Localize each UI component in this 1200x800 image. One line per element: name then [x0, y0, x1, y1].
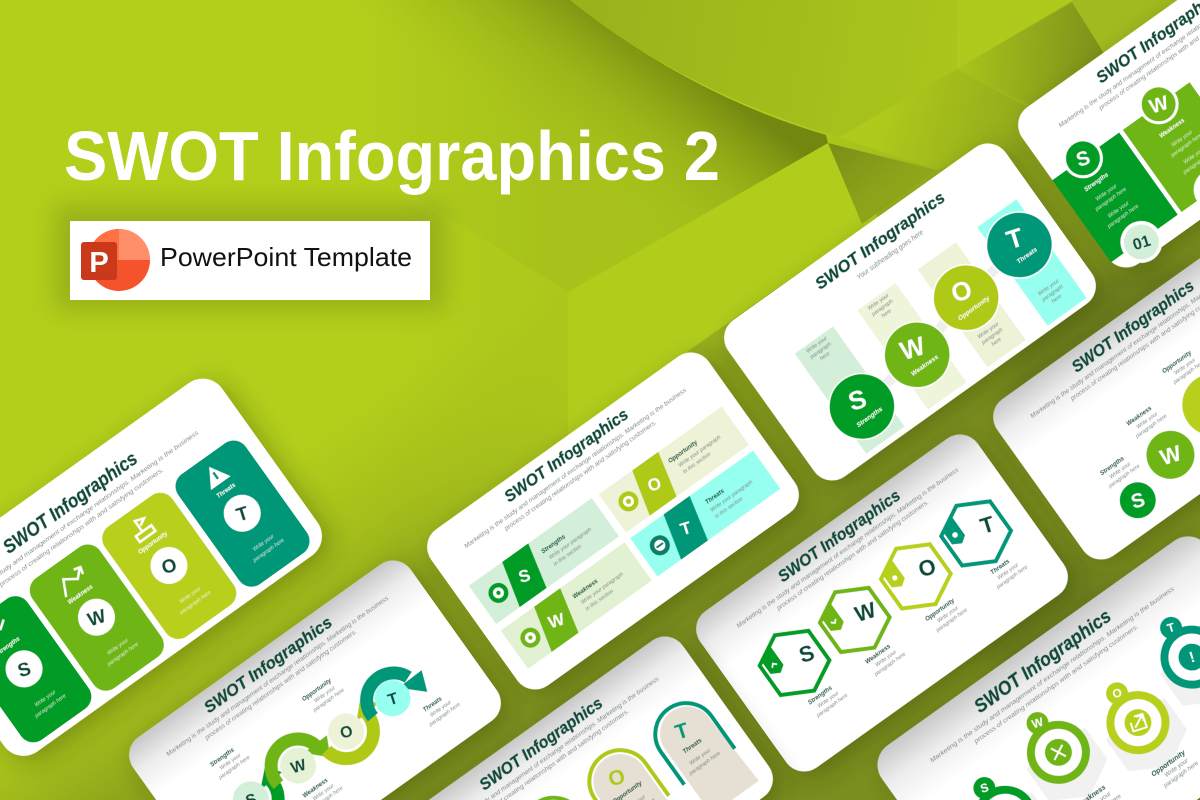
- ring W: [1002, 693, 1119, 800]
- circle W: Weakness: [910, 354, 940, 378]
- card subtitle: Marketing is the study and management of exchange relationships. Marketing is the business: [464, 388, 688, 550]
- label Opportunity: Write your: [1173, 357, 1197, 377]
- label Opportunity: Write your: [1164, 758, 1191, 779]
- label Threats: paragraph here: [427, 702, 462, 729]
- column: Threats: T: [234, 503, 252, 526]
- card subtitle: Marketing is the study and management of exchange relationships. Marketing is the business: [929, 585, 1176, 764]
- arch T: paragraph here: [687, 751, 722, 778]
- card: four circles: [715, 135, 1105, 489]
- column: Strengths: S: [15, 658, 34, 682]
- ring T: T: [1165, 620, 1177, 636]
- column S: paragraph: [808, 341, 833, 361]
- panel: Strengths: Strengths: [1084, 172, 1110, 193]
- label Weakness: Write your: [875, 649, 898, 668]
- circle W: W: [896, 330, 929, 366]
- card: panels with numbers: [1009, 0, 1200, 280]
- box: Strengths: S: [516, 565, 533, 587]
- letter circle O: O: [338, 723, 355, 743]
- label Opportunity: Opportunity: [1150, 749, 1188, 778]
- panel: Weakness: Weakness: [1159, 118, 1187, 140]
- hexagon O: O: [915, 553, 939, 582]
- label Threats: paragraph here: [995, 564, 1029, 591]
- hexagon T: T: [977, 511, 998, 539]
- column: Weakness: Weakness: [67, 584, 95, 606]
- label Opportunity: paragraph here: [1162, 760, 1200, 790]
- circle S: S: [845, 383, 870, 417]
- column: Weakness: W: [85, 606, 109, 631]
- label Opportunity: Opportunity: [301, 678, 333, 703]
- label Strengths: Strengths: [210, 747, 236, 769]
- label Strengths: Write your: [817, 690, 840, 710]
- circle W: [871, 309, 963, 401]
- label Weakness: Weakness: [302, 777, 330, 800]
- box: Strengths: Strengths: [541, 534, 567, 555]
- circle O: Opportunity: [957, 295, 991, 322]
- circle W: [1137, 421, 1200, 488]
- column S: [795, 326, 904, 454]
- box: Threats: in this section: [714, 496, 744, 520]
- arch O: O: [606, 765, 628, 792]
- hexagon S: [750, 618, 839, 708]
- column: Opportunity: O: [159, 555, 180, 579]
- panel: Strengths: Write your: [1107, 201, 1131, 220]
- box: Threats: Write your paragraph: [709, 479, 754, 514]
- box: Opportunity: [599, 407, 749, 533]
- label Strengths: paragraph here: [217, 755, 251, 782]
- card subtitle: process of creating relationships with and satisfying customers.: [972, 623, 1140, 746]
- label Threats: Threats: [990, 559, 1012, 576]
- column: Threats: Write your: [252, 534, 276, 553]
- panel: Strengths: paragraph here: [1094, 186, 1128, 213]
- card subtitle: Marketing is the study and management of exchange relationships. Marketing is the business: [166, 596, 390, 758]
- circle O: [1170, 361, 1200, 448]
- letter circle T: [367, 673, 418, 723]
- box: Weakness: in this section: [585, 589, 615, 612]
- arrow: W: [260, 720, 338, 791]
- box: Opportunity: in this section: [682, 451, 712, 475]
- icon: PowerPoint logo: [81, 229, 150, 291]
- column: Strengths: paragraph here: [33, 693, 68, 720]
- label Weakness: Weakness: [865, 643, 893, 666]
- box: Weakness: Weakness: [572, 578, 600, 601]
- card heading: SWOT Infographics: [774, 486, 904, 586]
- label Strengths: Write your: [1109, 461, 1132, 480]
- circle T: [973, 199, 1065, 291]
- letter circle S: [226, 774, 276, 800]
- card subtitle: process of creating relationships with and satisfying customers.: [0, 467, 165, 589]
- arrow: O: [314, 692, 397, 769]
- column: Threats: paragraph here: [251, 538, 286, 564]
- circle S: S: [1128, 489, 1148, 514]
- card: four boxes: [418, 344, 808, 698]
- card heading: SWOT Infographics: [500, 405, 632, 506]
- card heading: SWOT Infographics: [0, 449, 142, 559]
- circle O: O: [947, 274, 976, 309]
- label Strengths: Strengths: [1099, 456, 1126, 477]
- arch T: Threats: [682, 738, 704, 755]
- box: Opportunity: O: [645, 474, 664, 496]
- column O: paragraph: [980, 327, 1004, 347]
- column: Opportunity: Opportunity: [138, 531, 170, 556]
- box: Threats: Threats: [705, 488, 726, 506]
- label Threats: Threats: [422, 696, 444, 714]
- panel: Strengths: 01: [1131, 233, 1153, 254]
- badge shadow: [55, 205, 445, 310]
- circle T: Threats: [1016, 246, 1039, 266]
- label Strengths: Strengths: [807, 685, 834, 707]
- box: Threats: [630, 451, 780, 576]
- letter circle T: T: [386, 690, 400, 709]
- box: Strengths: in this section: [553, 544, 583, 568]
- column T: here: [1051, 294, 1063, 305]
- circle S: [1113, 475, 1163, 525]
- column S: here: [819, 351, 831, 362]
- label Weakness: Write your: [1136, 411, 1159, 430]
- column: Opportunity: Write your: [179, 586, 202, 605]
- circle S: Strengths: [855, 406, 884, 429]
- hexagon S: S: [796, 640, 817, 668]
- panel: Strengths: [1041, 116, 1191, 280]
- ring T: !: [1187, 649, 1197, 666]
- panel: Strengths: S: [1074, 147, 1093, 172]
- arch T: T: [672, 719, 692, 745]
- column W: Write your: [867, 293, 891, 312]
- ring S: S: [978, 780, 990, 796]
- circle S: [816, 360, 908, 453]
- hexagon W: [811, 575, 899, 665]
- column: Strengths: Write your: [34, 689, 57, 709]
- ring S: [949, 758, 1066, 800]
- column O: [918, 242, 1026, 367]
- label Threats: Write your: [429, 700, 453, 719]
- label Strengths: Write your: [219, 752, 242, 772]
- card heading: SWOT Infographics: [811, 188, 949, 293]
- card: four columns: [0, 369, 331, 765]
- label Strengths: paragraph here: [815, 693, 849, 720]
- box: Strengths: [469, 498, 619, 624]
- arch T: Write your: [689, 748, 712, 767]
- ring T: [1135, 598, 1200, 722]
- column: Weakness: [24, 539, 170, 697]
- circle T: T: [1003, 222, 1027, 255]
- badge text: PowerPoint Template: [160, 242, 412, 272]
- panel: Weakness: W: [1147, 92, 1171, 119]
- column: Weakness: paragraph here: [106, 641, 140, 668]
- card: arches: [392, 628, 782, 800]
- card: growing circles: [984, 214, 1200, 568]
- column T: [977, 199, 1087, 326]
- card subtitle: process of creating relationships with and satisfying customers.: [503, 420, 658, 533]
- hexagon W: W: [852, 597, 879, 627]
- column O: here: [991, 337, 1003, 348]
- label Weakness: paragraph here: [1134, 413, 1168, 440]
- card subtitle: process of creating relationships with and satisfying customers.: [203, 629, 358, 742]
- column O: Write your: [977, 321, 1000, 340]
- label Opportunity: Write your: [936, 605, 960, 624]
- card: rings: [868, 527, 1200, 800]
- arrow: S: [218, 760, 300, 800]
- card heading: SWOT Infographics: [476, 693, 606, 794]
- column: Opportunity: paragraph here: [178, 590, 212, 617]
- card subtitle: process of creating relationships with and satisfying customers.: [775, 500, 930, 613]
- circle W: W: [1157, 440, 1185, 470]
- column W: here: [881, 308, 893, 319]
- circle O: [920, 252, 1012, 344]
- column W: [857, 283, 966, 410]
- panel: Weakness: Write your: [1170, 129, 1194, 149]
- label Weakness: Weakness: [1126, 405, 1154, 428]
- title: SWOT Infographics 2: [64, 117, 720, 195]
- arch O: [577, 738, 692, 800]
- badge: PowerPoint Template: [70, 221, 430, 300]
- box: Opportunity: Opportunity: [668, 440, 700, 465]
- label Strengths: paragraph here: [1107, 463, 1141, 490]
- label Threats: Write your: [997, 562, 1020, 581]
- column: Opportunity: [96, 487, 242, 645]
- arrow: T: [356, 655, 434, 726]
- column: Weakness: Write your: [106, 638, 130, 657]
- card subheading: Your subheading goes here: [856, 229, 925, 281]
- hexagon T: [932, 488, 1020, 579]
- column: Strengths: [0, 590, 97, 748]
- column T: Write your: [1037, 278, 1061, 297]
- panel: Weakness: [1111, 66, 1200, 230]
- hexagon O: [872, 531, 960, 622]
- card: hexagons: [687, 426, 1077, 780]
- label Opportunity: paragraph here: [312, 687, 346, 714]
- box: Threats: T: [678, 518, 694, 539]
- box: Weakness: Write your paragraph: [580, 572, 625, 606]
- card subtitle: Marketing is the study and management of exchange relationships. Marketing is the business: [736, 467, 960, 630]
- label Weakness: paragraph here: [873, 651, 907, 678]
- box: Weakness: [501, 542, 652, 669]
- column S: Write your: [805, 335, 829, 355]
- column W: paragraph: [870, 299, 894, 318]
- card heading: SWOT Infographics: [200, 613, 336, 717]
- ring O: [1081, 663, 1199, 788]
- card: curved arrows: [120, 552, 510, 800]
- box: Weakness: W: [546, 609, 568, 632]
- letter circle W: W: [289, 756, 309, 777]
- label Opportunity: Opportunity: [925, 598, 956, 623]
- box: Strengths: Write your paragraph: [548, 527, 593, 561]
- panel: Strengths: Write your: [1095, 183, 1118, 203]
- card heading: SWOT Infographics: [971, 606, 1116, 718]
- column: Threats: Threats: [216, 482, 238, 500]
- ring O: O: [1110, 685, 1124, 701]
- ring W: W: [1030, 714, 1046, 731]
- panel: Strengths: paragraph here: [1106, 204, 1140, 230]
- arch T: [643, 690, 759, 800]
- background folds: [200, 0, 1200, 690]
- label Opportunity: Write your: [313, 685, 337, 704]
- column T: paragraph: [1040, 284, 1065, 304]
- arch W: [510, 786, 625, 800]
- label Opportunity: Opportunity: [1162, 350, 1194, 375]
- column: Threats: [170, 435, 316, 593]
- letter circle W: [273, 741, 323, 791]
- box: Opportunity: Write your paragraph: [678, 435, 722, 469]
- icon: PowerPoint logo: P: [89, 247, 109, 279]
- letter circle O: [321, 706, 371, 756]
- label Opportunity: paragraph here: [935, 607, 969, 634]
